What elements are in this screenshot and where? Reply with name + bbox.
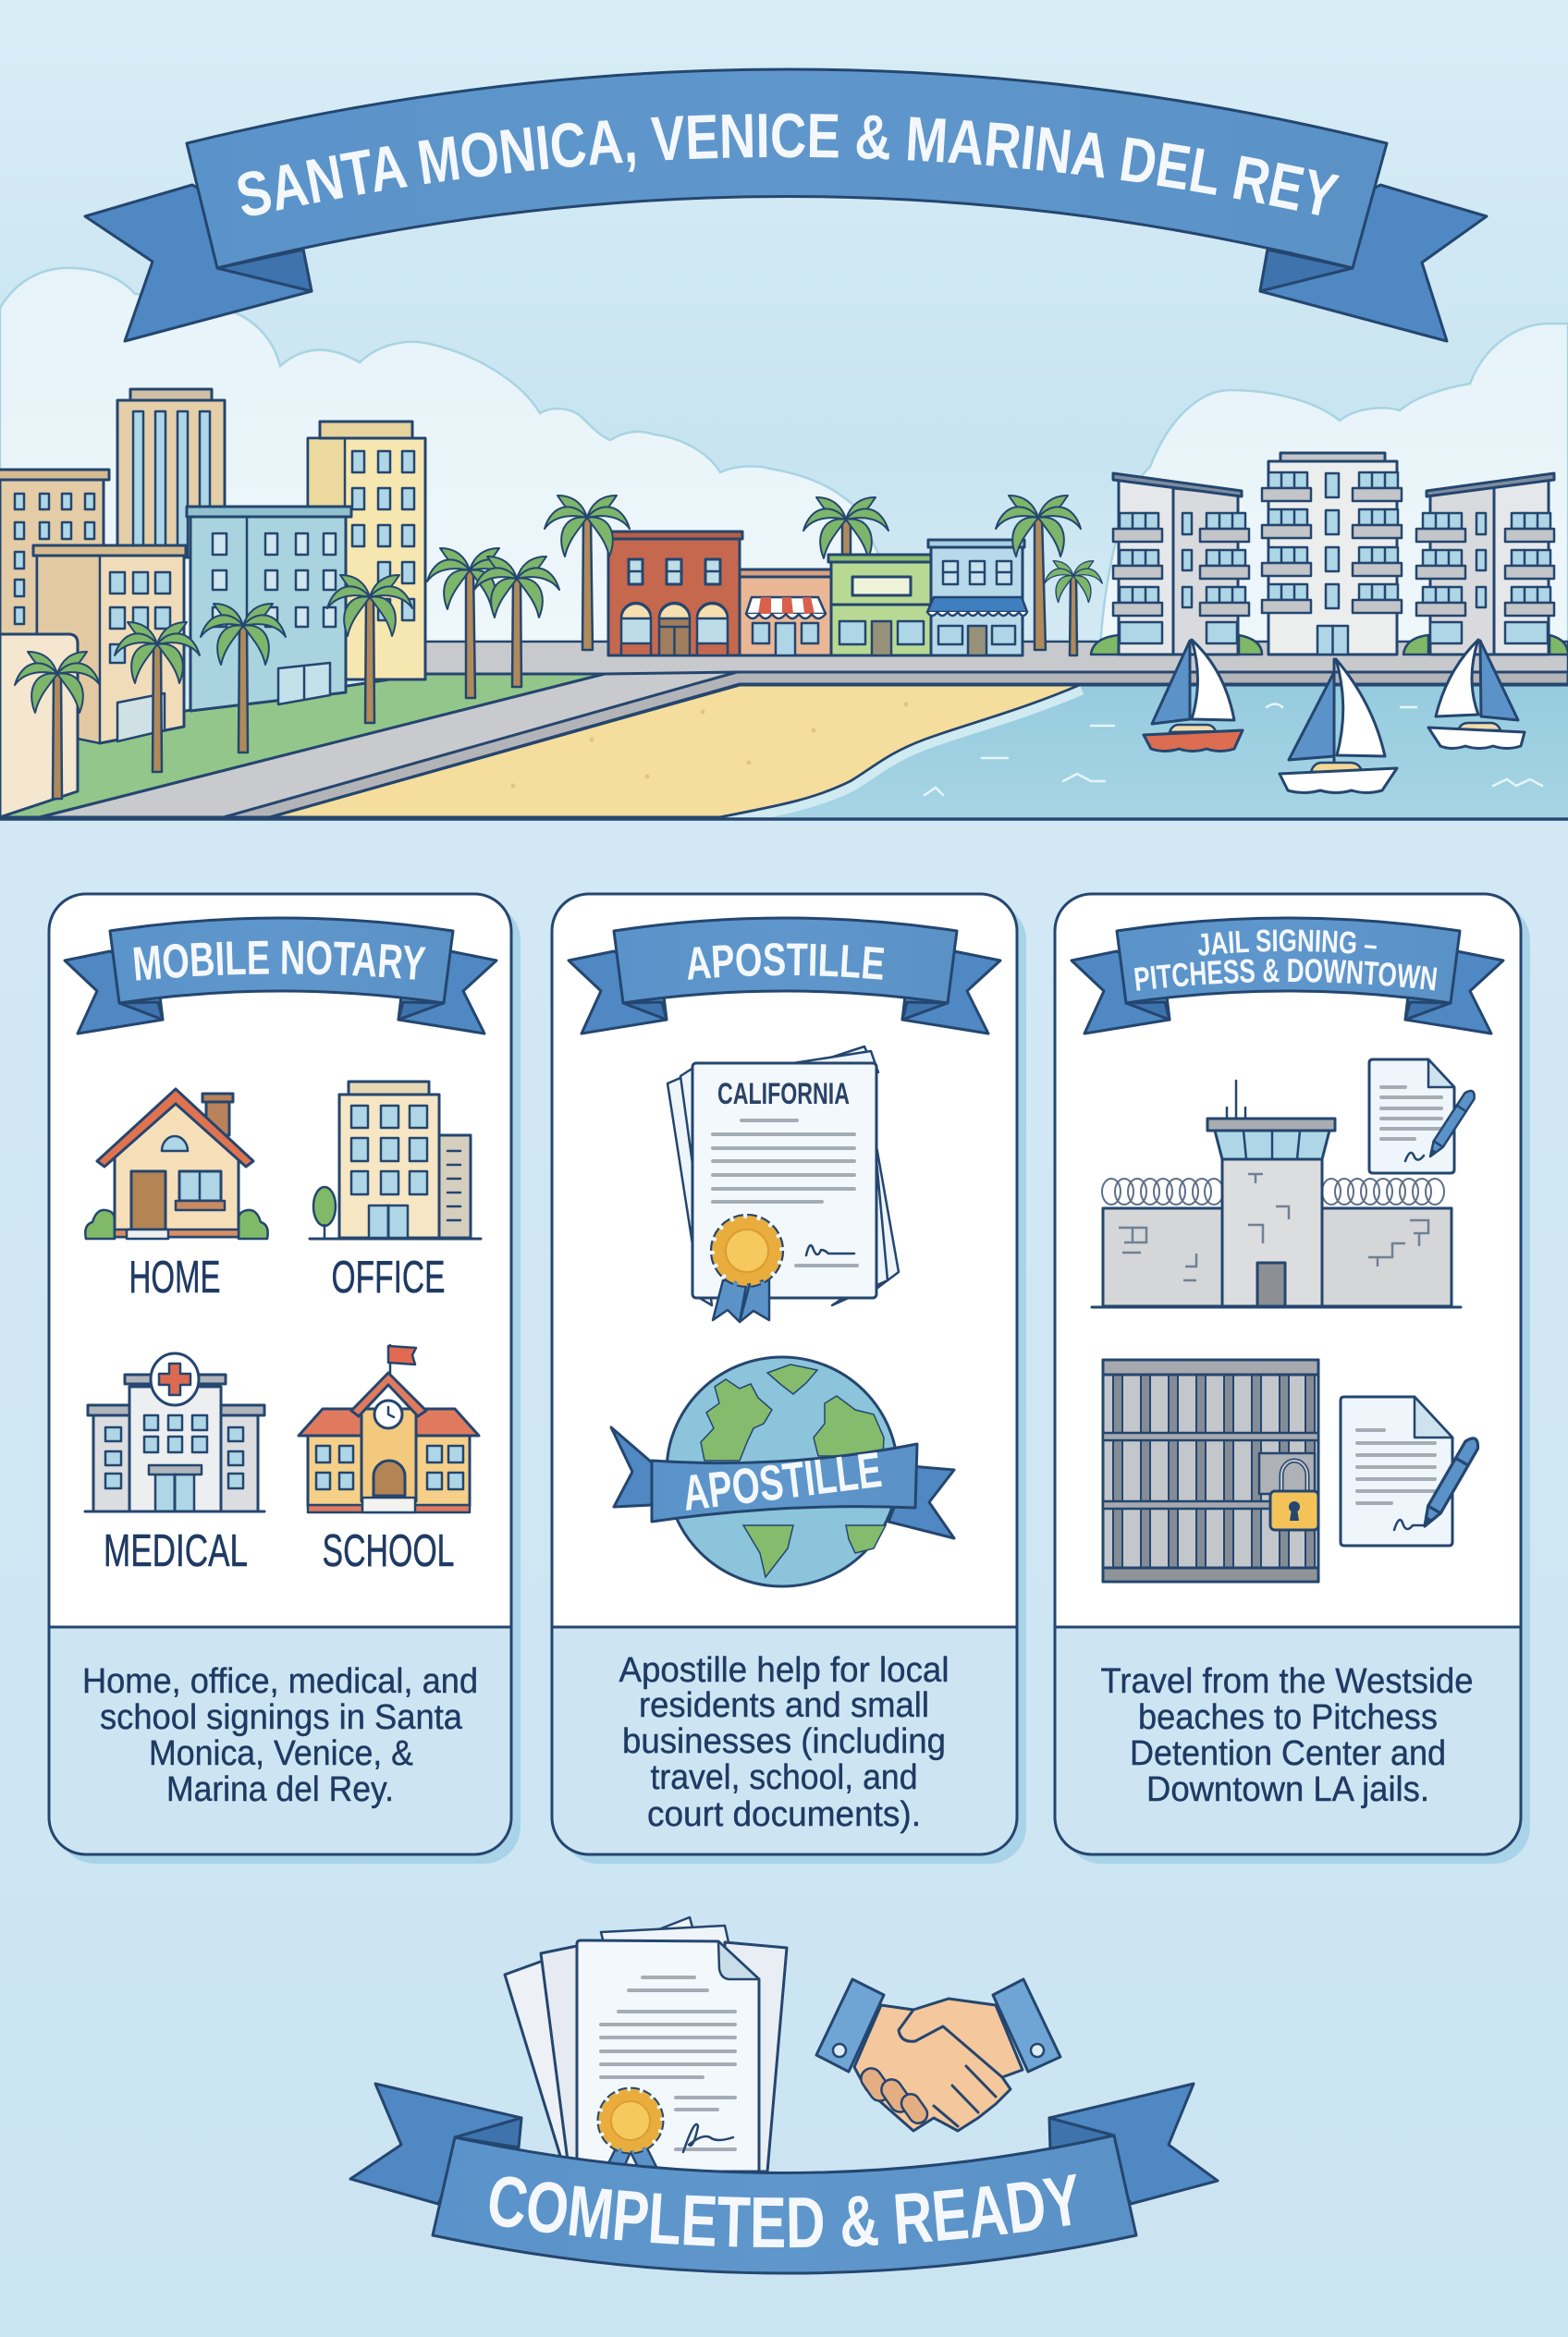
building: teal	[187, 507, 351, 711]
scene bottom line	[0, 817, 1568, 821]
palm trees	[15, 496, 1102, 799]
heading ribbon: mobile notary	[63, 917, 497, 1035]
description: apostille	[619, 1651, 949, 1834]
description: mobile notary: school signings in Santa	[100, 1698, 463, 1737]
building: tan front	[33, 545, 186, 743]
description: jail signing: Detention Center and	[1130, 1734, 1446, 1773]
back road band	[425, 642, 1568, 684]
apartment building C	[1416, 473, 1554, 655]
icon: document and pen bottom	[1341, 1397, 1481, 1546]
icon: california certificate: CALIFORNIA	[717, 1077, 850, 1110]
description: jail signing	[1100, 1662, 1474, 1809]
heading text: jail signing: JAIL SIGNING –	[1198, 929, 1377, 956]
palm behind shops	[803, 497, 888, 558]
heading text: apostille: APOSTILLE	[688, 943, 884, 980]
icon: home	[85, 1089, 268, 1239]
shop: green	[828, 555, 931, 655]
title text: SANTA MONICA, VENICE & MARINA DEL REY	[239, 113, 1341, 216]
heading ribbon: jail signing	[1072, 918, 1503, 1034]
sailboat white large	[1280, 659, 1397, 793]
bottom banner tails	[350, 2084, 521, 2204]
description: apostille: residents and small	[639, 1686, 929, 1725]
scene: coastal skyline	[0, 266, 1568, 821]
title banner	[83, 68, 1488, 342]
description: apostille: Apostille help for local	[619, 1651, 949, 1690]
banner main ribbon	[187, 69, 1387, 268]
label: medical: MEDICAL	[104, 1526, 248, 1576]
bottom banner main ribbon	[433, 2135, 1136, 2273]
apartment bushes	[1091, 635, 1568, 655]
icon: school	[299, 1345, 479, 1512]
description: mobile notary: Monica, Venice, &	[149, 1734, 413, 1773]
description: apostille: court documents).	[647, 1795, 921, 1834]
sand speckles	[510, 703, 908, 788]
building: tan left	[0, 470, 109, 665]
description: apostille: businesses (including	[622, 1722, 946, 1761]
clouds right	[1100, 324, 1568, 647]
lawn	[0, 674, 605, 817]
panel: mobile notary	[48, 893, 521, 1864]
banner: completed and ready	[349, 2082, 1219, 2274]
apartment building A	[1113, 473, 1249, 655]
icon: office	[310, 1082, 481, 1239]
heading text: jail signing: PITCHESS & DOWNTOWN	[1133, 959, 1437, 991]
apartment building B	[1262, 453, 1402, 655]
heading text: jail signing	[1133, 929, 1437, 991]
water line	[1080, 684, 1568, 686]
banner tail left	[85, 185, 312, 341]
icon: globe with apostille ribbon: APOSTILLE	[680, 1442, 885, 1522]
shop: red brick	[608, 532, 742, 655]
label: school: SCHOOL	[322, 1526, 455, 1576]
sailboat white right	[1428, 640, 1525, 749]
sand beach	[270, 685, 1080, 817]
icon: jail cell with padlock	[1103, 1360, 1318, 1582]
icon: document and pen top	[1369, 1059, 1477, 1173]
panel: jail signing	[1054, 893, 1530, 1864]
description: jail signing: Travel from the Westside	[1100, 1662, 1474, 1701]
banner tail right	[1260, 185, 1487, 341]
promenade	[40, 672, 1568, 817]
promenade dark strip	[224, 672, 1568, 817]
description: jail signing: beaches to Pitchess	[1138, 1698, 1438, 1737]
sky	[0, 0, 1568, 818]
label: office: OFFICE	[331, 1253, 446, 1303]
icon: completed document stack	[505, 1917, 787, 2172]
icon: california certificate	[668, 1046, 899, 1322]
shop: peach with striped awning	[740, 569, 831, 655]
icon: medical	[85, 1353, 264, 1511]
shop: blue	[927, 540, 1027, 655]
description: apostille: travel, school, and	[651, 1758, 917, 1797]
sailboat red	[1144, 640, 1243, 751]
bottom banner text: COMPLETED & READY	[490, 2174, 1076, 2248]
building: yellow	[308, 422, 425, 679]
icon: detention building	[1092, 1081, 1461, 1307]
icon: handshake	[816, 1979, 1060, 2131]
label: home: HOME	[129, 1253, 220, 1303]
description: mobile notary: Marina del Rey.	[166, 1770, 394, 1809]
description: mobile notary: Home, office, medical, and	[82, 1662, 478, 1701]
water ripples	[925, 704, 1542, 795]
heading ribbon: apostille	[569, 918, 1000, 1034]
water	[720, 685, 1568, 817]
heading ribbon: mobile notary: MOBILE NOTARY	[133, 941, 426, 981]
building: cream	[0, 634, 78, 817]
panel: apostille	[551, 893, 1026, 1864]
icon: globe with apostille ribbon	[611, 1357, 954, 1586]
clouds left	[0, 268, 925, 647]
description: mobile notary	[82, 1662, 478, 1809]
description: jail signing: Downtown LA jails.	[1146, 1770, 1429, 1809]
building: tall tower	[117, 389, 225, 557]
